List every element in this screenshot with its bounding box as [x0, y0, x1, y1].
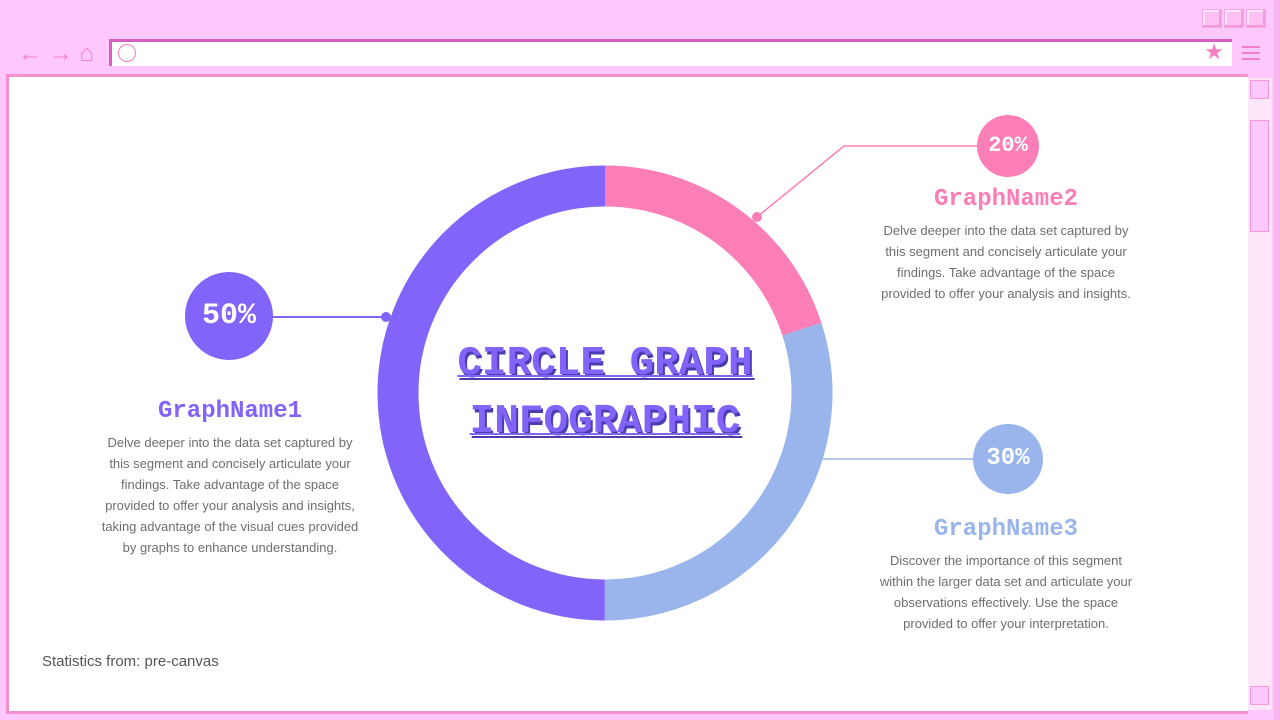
title: [457, 341, 755, 445]
text block: GraphName3: GraphName3: [934, 516, 1078, 543]
text block: GraphName1: Delve deeper into the data set captured by this segment and concisely articulate your findings. Take advantage of the space provided to offer your analysis and insights, taking advantage of the visual cues provided by graphs to enhance understanding.: [102, 435, 358, 555]
nav icons: ← → ⌂: [18, 40, 94, 67]
text block: GraphName2: Delve deeper into the data set captured by this segment and concisely articulate your findings. Take advantage of the space provided to offer your analysis and insights.: [881, 223, 1131, 301]
text block: GraphName2: GraphName2: [934, 186, 1078, 213]
title: CIRCLE GRAPH: [457, 341, 753, 387]
badge 20%: 20%: [988, 133, 1028, 158]
window controls: [1202, 9, 1266, 28]
badge 30%: [973, 424, 1043, 494]
title: INFOGRAPHIC: [470, 399, 740, 445]
text block: GraphName2: [881, 186, 1131, 301]
badge 20%: [977, 115, 1039, 177]
text block: GraphName1: GraphName1: [158, 398, 302, 425]
scrollbar: [1248, 78, 1272, 710]
badge 50%: 50%: [202, 299, 256, 333]
badge 30%: 30%: [986, 445, 1030, 472]
address bar: [109, 39, 1232, 66]
source note: Statistics from: pre-canvas: [42, 653, 219, 670]
icon: star: ★: [1204, 39, 1224, 64]
icon: menu: [1242, 46, 1260, 60]
connector lines: [272, 316, 386, 318]
text block: GraphName3: [880, 516, 1132, 631]
badge 50%: [185, 272, 273, 360]
icon: globe: [118, 44, 136, 62]
text block: GraphName3: Discover the importance of this segment within the larger data set and articulate your observations effectively. Use the space provided to offer your interpretation.: [880, 553, 1132, 631]
right edge: [1274, 0, 1280, 720]
